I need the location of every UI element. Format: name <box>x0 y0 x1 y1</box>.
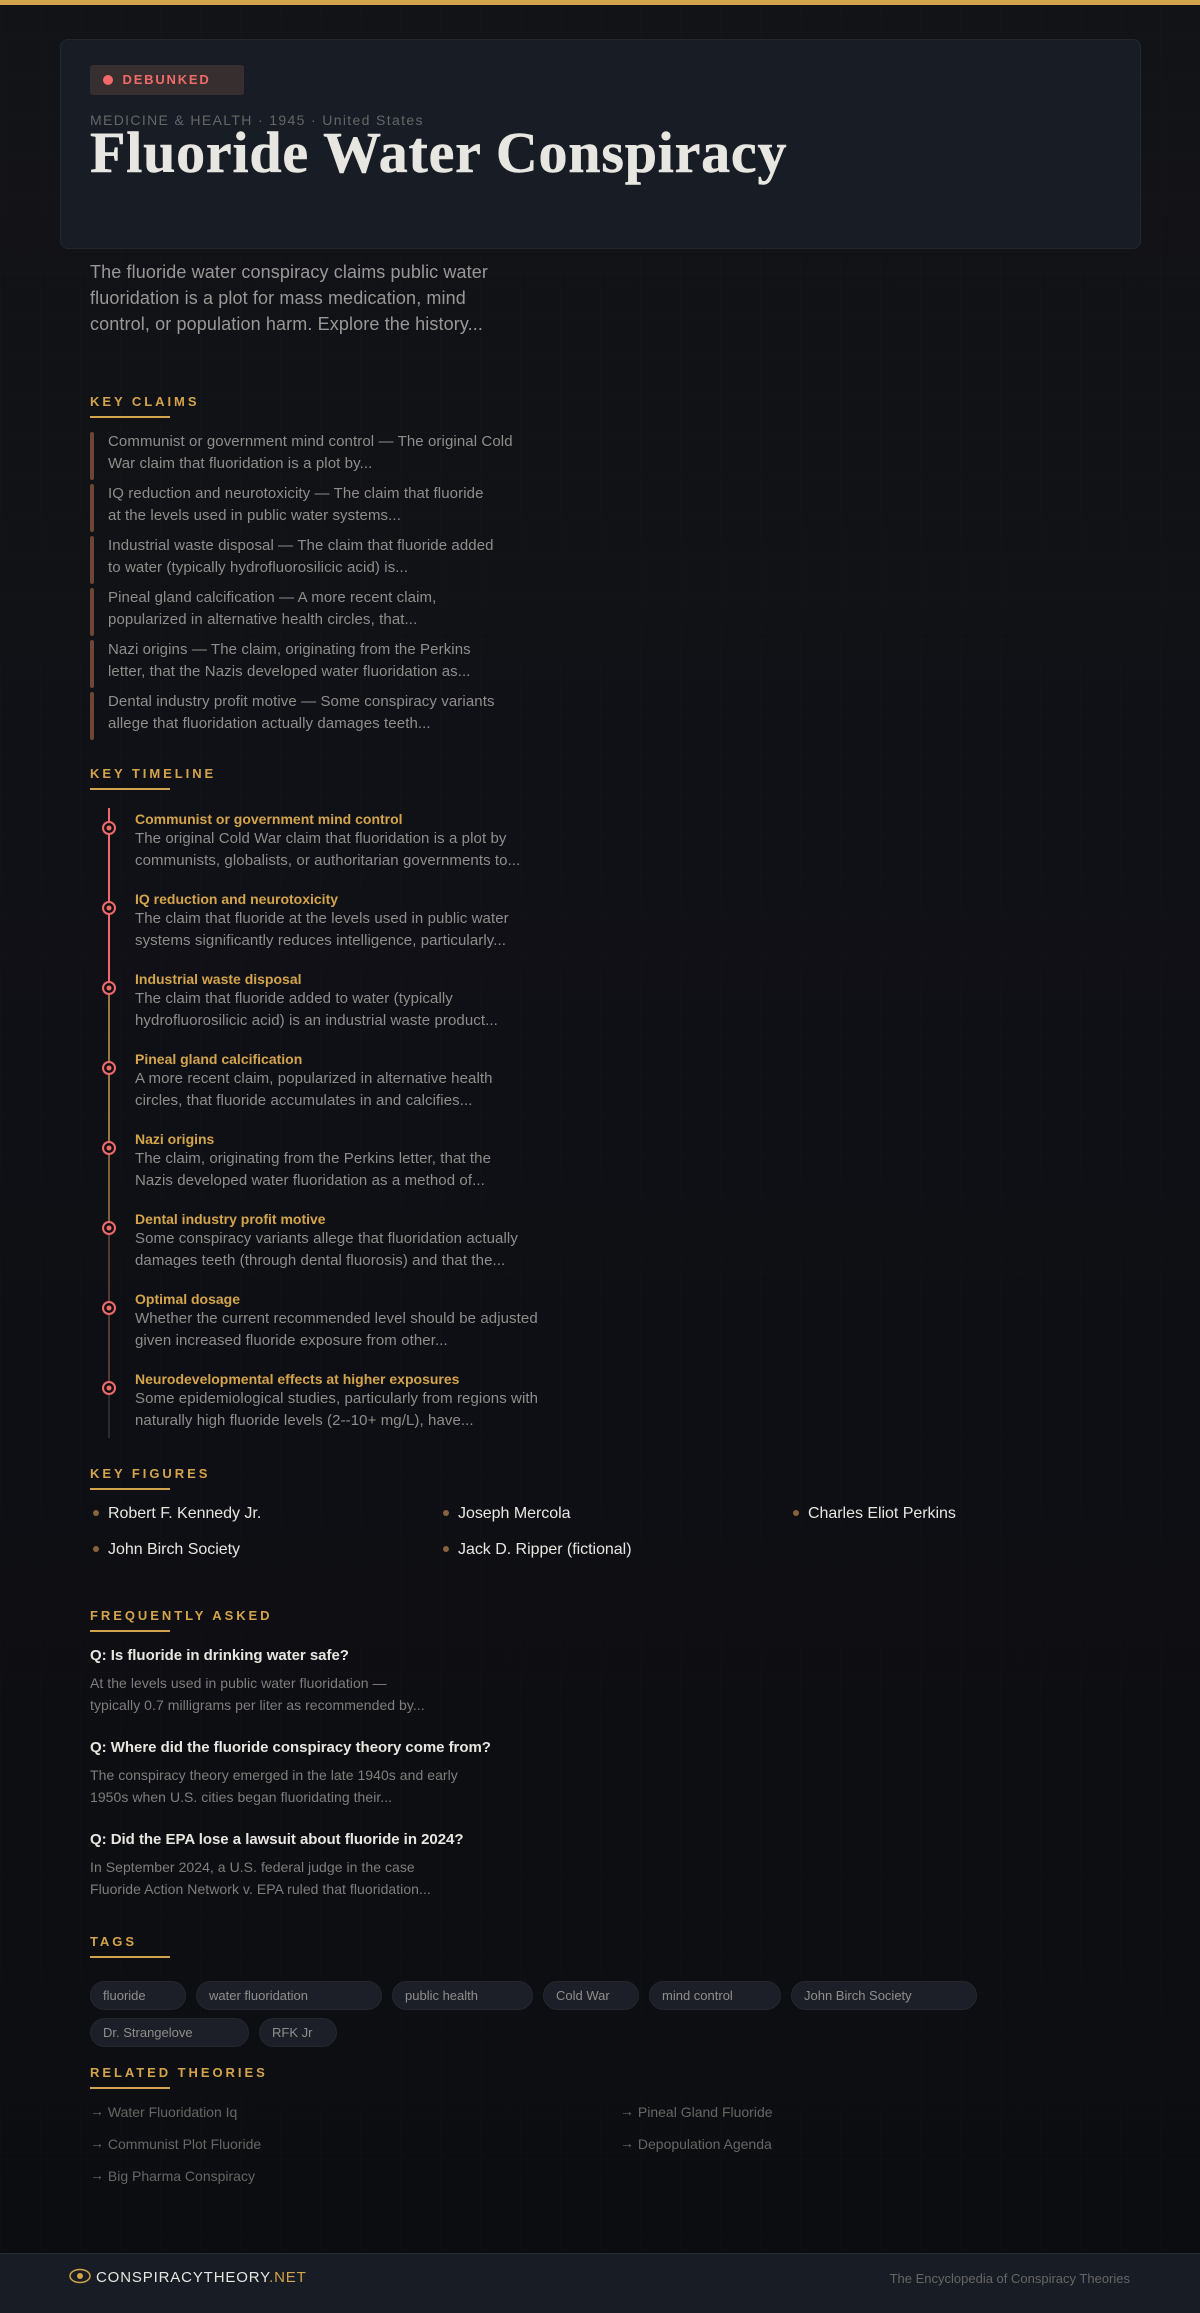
timeline item 3: hydrofluorosilicic acid) is an industrial waste product... <box>135 1012 498 1029</box>
timeline item 8: Some epidemiological studies, particularly from regions with <box>135 1390 538 1407</box>
panel: header card <box>60 39 1141 249</box>
claim 1: War claim that fluoridation is a plot by... <box>108 455 372 472</box>
tag: Dr. Strangelove: Dr. Strangelove <box>103 2025 193 2040</box>
faq 3 <box>90 1831 463 1897</box>
claim 2 <box>90 484 484 532</box>
related link: Pineal Gland Fluoride: → Pineal Gland Fluoride <box>620 2103 773 2120</box>
figure: Robert F. Kennedy Jr.: Robert F. Kennedy Jr. <box>108 1505 261 1522</box>
claim 6: allege that fluoridation actually damages teeth... <box>108 715 431 732</box>
timeline item 1 <box>102 811 520 869</box>
timeline item 3 <box>102 971 498 1029</box>
tag: Cold War <box>543 1981 639 2010</box>
claim 5: letter, that the Nazis developed water fluoridation as... <box>108 663 471 680</box>
tag: John Birch Society <box>791 1981 977 2010</box>
claim 3: to water (typically hydrofluorosilicic acid) is... <box>108 559 408 576</box>
title: Fluoride Water Conspiracy <box>90 120 787 185</box>
status badge <box>90 65 244 95</box>
claim 6 <box>90 692 495 740</box>
tag: mind control: mind control <box>662 1988 733 2003</box>
timeline item 2: systems significantly reduces intelligence, particularly... <box>135 932 506 949</box>
timeline item 4: circles, that fluoride accumulates in and calcifies... <box>135 1092 473 1109</box>
tag: John Birch Society: John Birch Society <box>804 1988 912 2003</box>
related link: Big Pharma Conspiracy: → Big Pharma Conspiracy <box>90 2167 255 2184</box>
tag: water fluoridation <box>196 1981 382 2010</box>
claim 4: Pineal gland calcification — A more recent claim, <box>108 589 436 606</box>
timeline item 5: Nazi origins <box>135 1131 214 1147</box>
timeline item 7: given increased fluoride exposure from other... <box>135 1332 448 1349</box>
intro text: fluoridation is a plot for mass medication, mind <box>90 288 466 308</box>
intro text: The fluoride water conspiracy claims public water <box>90 262 488 282</box>
faq 2 <box>90 1739 491 1805</box>
tag: public health <box>392 1981 533 2010</box>
timeline item 5 <box>102 1131 491 1189</box>
faq 1: At the levels used in public water fluoridation — <box>90 1675 387 1691</box>
tag: fluoride: fluoride <box>103 1988 146 2003</box>
faq 3: Q: Did the EPA lose a lawsuit about fluoride in 2024? <box>90 1831 463 1848</box>
timeline item 6: damages teeth (through dental fluorosis) and that the... <box>135 1252 505 1269</box>
timeline item 4: A more recent claim, popularized in alternative health <box>135 1070 493 1087</box>
tag: public health: public health <box>405 1988 478 2003</box>
claim 5 <box>90 640 471 688</box>
claim 6: Dental industry profit motive — Some conspiracy variants <box>108 693 495 710</box>
timeline item 6: Some conspiracy variants allege that fluoridation actually <box>135 1230 518 1247</box>
category meta line: MEDICINE & HEALTH · 1945 · United States <box>90 112 424 128</box>
timeline item 7: Whether the current recommended level should be adjusted <box>135 1310 538 1327</box>
faq 3: In September 2024, a U.S. federal judge in the case <box>90 1859 415 1875</box>
timeline item 3: Industrial waste disposal <box>135 971 302 987</box>
tag: mind control <box>649 1981 781 2010</box>
claim 1: Communist or government mind control — The original Cold <box>108 433 513 450</box>
timeline item 6 <box>102 1211 518 1269</box>
timeline item 2: IQ reduction and neurotoxicity <box>135 891 338 907</box>
tag: Cold War: Cold War <box>556 1988 610 2003</box>
figure: John Birch Society: John Birch Society <box>108 1541 240 1558</box>
tag: fluoride <box>90 1981 186 2010</box>
timeline item 4: Pineal gland calcification <box>135 1051 302 1067</box>
related link: Water Fluoridation Iq: → Water Fluoridation Iq <box>90 2103 237 2120</box>
timeline item 5: Nazis developed water fluoridation as a method of... <box>135 1172 485 1189</box>
timeline spine <box>108 808 110 1438</box>
claim 2: IQ reduction and neurotoxicity — The claim that fluoride <box>108 485 484 502</box>
faq 3: Fluoride Action Network v. EPA ruled that fluoridation... <box>90 1881 431 1897</box>
figure: Jack D. Ripper: Jack D. Ripper (fictional) <box>458 1541 632 1558</box>
icon: eye logo <box>69 2268 91 2284</box>
related link: Depopulation Agenda: → Depopulation Agenda <box>620 2135 772 2152</box>
timeline item 7 <box>102 1291 538 1349</box>
faq 2: 1950s when U.S. cities began fluoridating their... <box>90 1789 392 1805</box>
claim 5: Nazi origins — The claim, originating from the Perkins <box>108 641 471 658</box>
claim 2: at the levels used in public water systems... <box>108 507 401 524</box>
timeline item 2: The claim that fluoride at the levels used in public water <box>135 910 509 927</box>
panel: key claims list <box>90 432 513 740</box>
claim 4 <box>90 588 436 636</box>
heading: related theories: RELATED THEORIES <box>90 2065 268 2080</box>
claim 3 <box>90 536 494 584</box>
faq 2: Q: Where did the fluoride conspiracy theory come from? <box>90 1739 491 1756</box>
claim 4: popularized in alternative health circles, that... <box>108 611 417 628</box>
timeline item 8 <box>102 1371 538 1429</box>
faq 1 <box>90 1647 425 1713</box>
top accent bar <box>0 0 1200 5</box>
timeline item 2 <box>102 891 509 949</box>
footer wordmark: CONSPIRACYTHEORY.NET <box>96 2269 307 2286</box>
heading: tags: TAGS <box>90 1934 137 1949</box>
claim 3: Industrial waste disposal — The claim that fluoride added <box>108 537 494 554</box>
tag: RFK Jr <box>259 2018 337 2047</box>
claim 1 <box>90 432 513 480</box>
intro text: control, or population harm. Explore the history... <box>90 314 483 334</box>
figure: Joseph Mercola: Joseph Mercola <box>458 1505 571 1522</box>
timeline item 6: Dental industry profit motive <box>135 1211 326 1227</box>
tag: RFK Jr: RFK Jr <box>272 2025 312 2040</box>
timeline item 8: naturally high fluoride levels (2--10+ mg/L), have... <box>135 1412 474 1429</box>
footer <box>0 2253 1200 2313</box>
faq 1: Q: Is fluoride in drinking water safe? <box>90 1647 349 1664</box>
timeline item 5: The claim, originating from the Perkins letter, that the <box>135 1150 491 1167</box>
heading: frequently asked: FREQUENTLY ASKED <box>90 1608 273 1623</box>
related link: Communist Plot Fluoride: → Communist Plot Fluoride <box>90 2135 261 2152</box>
tag: water fluoridation: water fluoridation <box>209 1988 308 2003</box>
faq 2: The conspiracy theory emerged in the late 1940s and early <box>90 1767 458 1783</box>
icon: status dot <box>103 75 113 85</box>
tag: Dr. Strangelove <box>90 2018 249 2047</box>
timeline item 3: The claim that fluoride added to water (typically <box>135 990 453 1007</box>
intro text <box>90 262 488 334</box>
badge label: DEBUNKED <box>122 72 211 87</box>
faq 1: typically 0.7 milligrams per liter as recommended by... <box>90 1697 425 1713</box>
timeline item 8: Neurodevelopmental effects at higher exposures <box>135 1371 459 1387</box>
footer tagline: The Encyclopedia of Conspiracy Theories <box>890 2271 1130 2286</box>
timeline item 1: communists, globalists, or authoritarian governments to... <box>135 852 520 869</box>
heading: key claims: KEY CLAIMS <box>90 394 199 409</box>
heading: key figures: KEY FIGURES <box>90 1466 210 1481</box>
timeline item 7: Optimal dosage <box>135 1291 240 1307</box>
heading: key timeline: KEY TIMELINE <box>90 766 216 781</box>
figure: Charles Eliot Perkins: Charles Eliot Perkins <box>808 1505 956 1522</box>
timeline item 4 <box>102 1051 493 1109</box>
timeline item 1: The original Cold War claim that fluoridation is a plot by <box>135 830 506 847</box>
timeline item 1: Communist or government mind control <box>135 811 403 827</box>
